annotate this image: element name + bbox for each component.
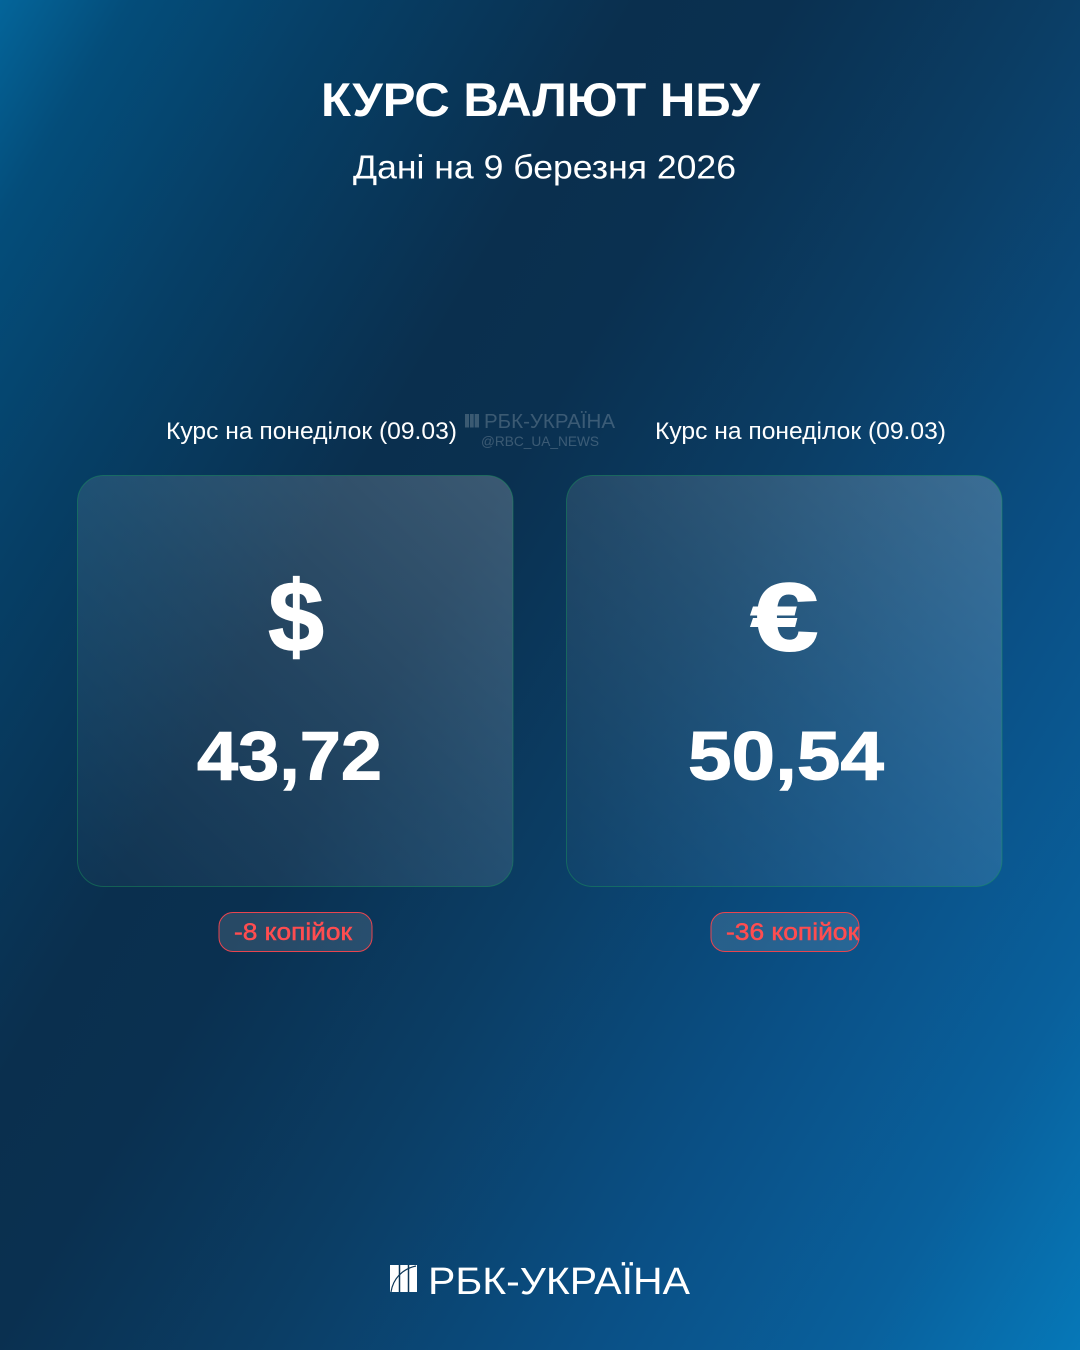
subtitle: date: Дані на 9 березня 2026 — [353, 148, 736, 186]
icon: RBC logo mark — [390, 1265, 417, 1292]
USD rate value: 43,72 — [197, 718, 382, 794]
badge: EUR change: -36 копійок — [726, 919, 860, 946]
icon: euro sign: € — [751, 564, 818, 671]
label: left card heading: Курс на понеділок (09.03) — [166, 418, 457, 445]
brand name: РБК-УКРАЇНА — [428, 1261, 691, 1303]
badge: USD change — [219, 912, 372, 952]
EUR rate value: 50,54 — [688, 718, 884, 794]
badge: USD change: -8 копійок — [234, 919, 353, 946]
footer logo — [390, 1261, 691, 1303]
badge: EUR change — [711, 912, 860, 952]
icon: dollar sign: $ — [268, 561, 324, 673]
panel: USD card — [78, 476, 513, 886]
watermark handle: @RBC_UA_NEWS — [481, 433, 599, 449]
watermark — [465, 411, 616, 449]
panel: EUR card — [566, 476, 1002, 886]
watermark brand name: РБК-УКРАЇНА — [484, 411, 616, 433]
label: right card heading: Курс на понеділок (09.03) — [655, 418, 946, 445]
icon: watermark logo — [465, 414, 479, 428]
title: КУРС ВАЛЮТ НБУ — [321, 74, 760, 127]
